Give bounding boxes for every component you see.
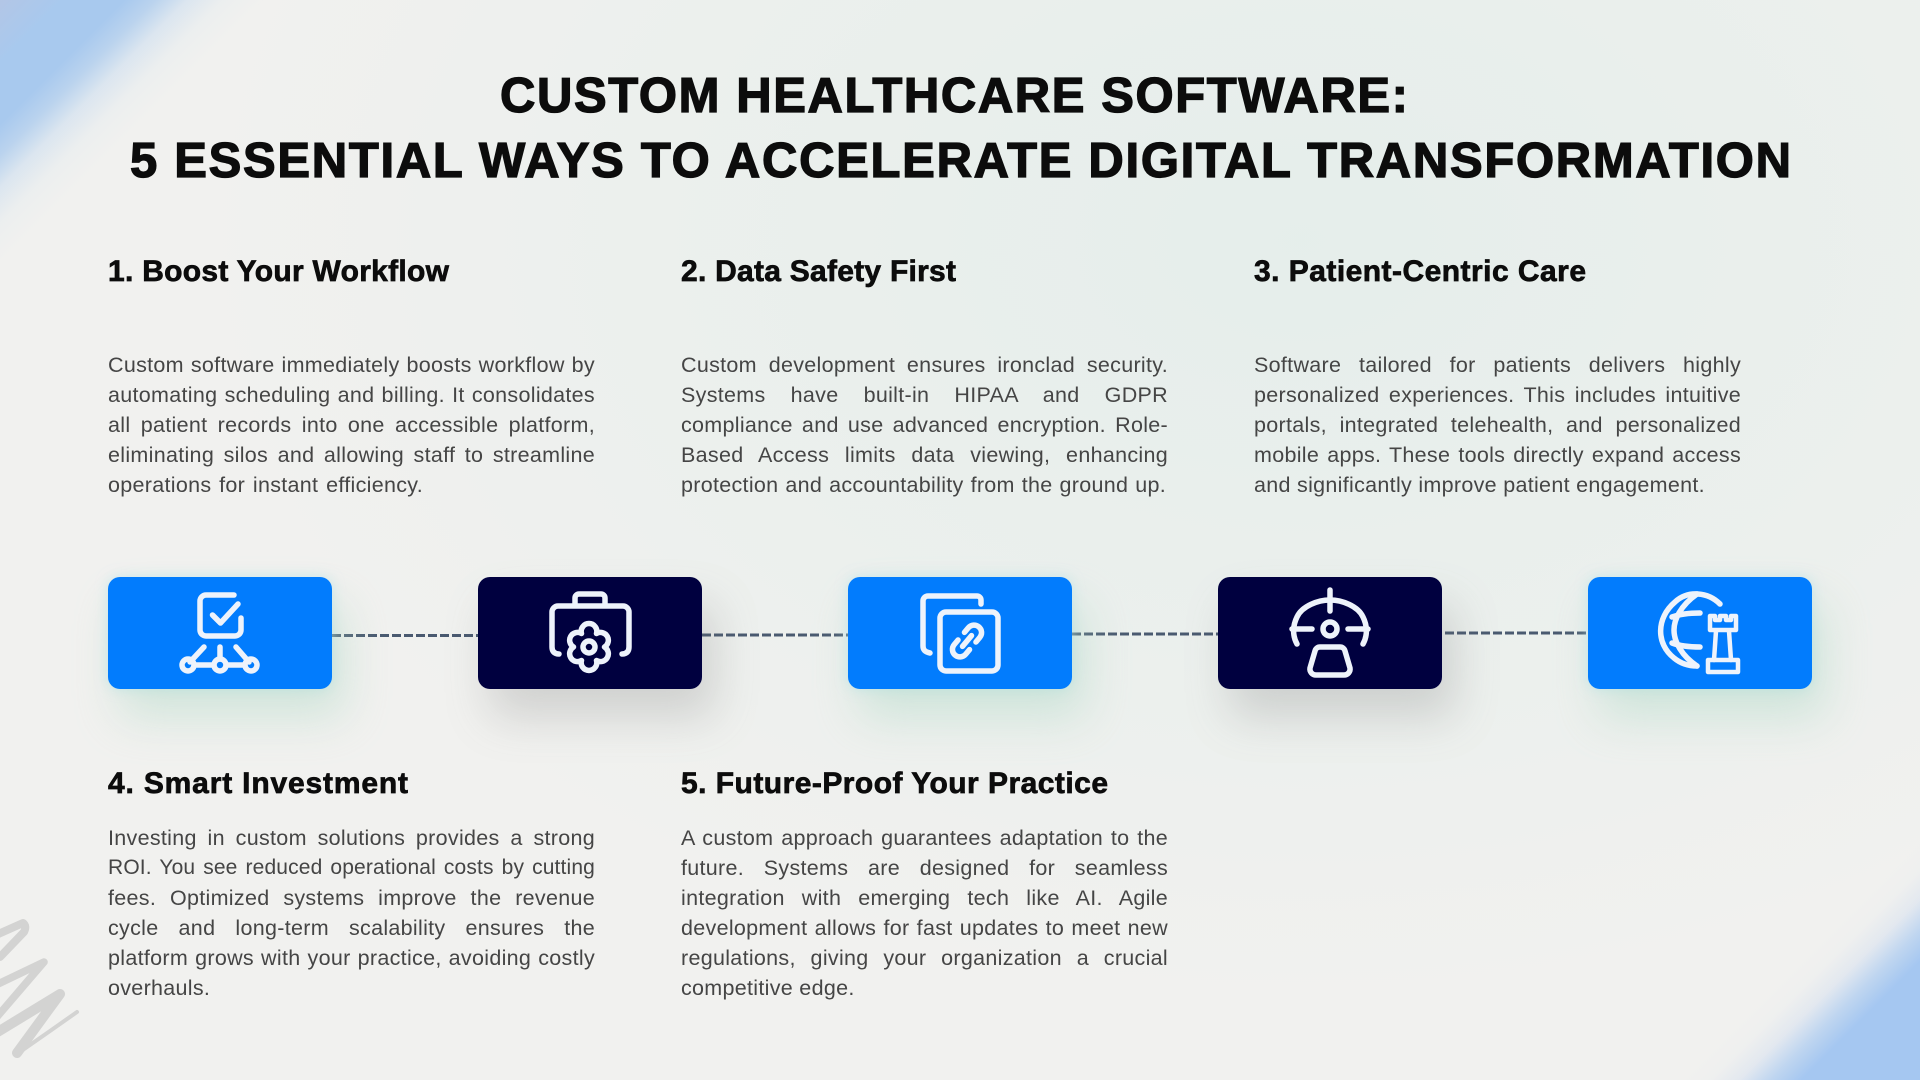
heading: section 1: 1. Boost Your Workflow [108,255,450,288]
text: section 4: platform grows with your practice, avoiding costly [108,946,595,970]
icon: linked documents [923,596,998,671]
title: CUSTOM HEALTHCARE SOFTWARE: [500,69,1408,123]
text: section 2: compliance and use advanced encryption. Role- [681,413,1168,437]
text: section 1: all patient records into one accessible platform, [108,413,595,437]
text: section 3: mobile apps. These tools directly expand access [1254,443,1741,467]
icons [179,587,1740,678]
icon tile 4 [1218,577,1442,689]
text: section 3: and significantly improve patient engagement. [1254,473,1705,497]
text: section 5: regulations, giving your organization a crucial [681,946,1168,970]
text: section 2: Systems have built-in HIPAA and GDPR [681,383,1168,407]
text: section 1: operations for instant efficiency. [108,473,423,497]
icon tile 1 [108,577,332,689]
text: section 1 [108,353,595,497]
text: section 5: competitive edge. [681,976,855,1000]
text: section 4: overhauls. [108,976,210,1000]
text: section 2: Based Access limits data viewing, enhancing [681,443,1168,467]
text: section 4 [108,826,595,1000]
icon tile 3 [848,577,1072,689]
heading: section 2: 2. Data Safety First [681,255,956,288]
text: section 5: A custom approach guarantees adaptation to the [681,826,1168,850]
text: section 5: future. Systems are designed for seamless [681,856,1168,880]
icon: target person [1292,590,1368,675]
text: section 2: protection and accountability from the ground up. [681,473,1166,497]
heading: section 3: 3. Patient-Centric Care [1254,255,1586,288]
icon: briefcase with gear [552,594,629,670]
text: section 5: development allows for fast updates to meet new [681,916,1168,940]
text: section 1: automating scheduling and billing. It consolidates [108,383,595,407]
text: section 2 [681,353,1168,497]
text: section 3: personalized experiences. This includes intuitive [1254,383,1741,407]
icon tile 2 [478,577,702,689]
text: section 1: eliminating silos and allowing staff to streamline [108,443,595,467]
connector: dashed line [332,632,1586,637]
text: section 1: Custom software immediately boosts workflow by [108,353,595,377]
scribble decoration [0,919,79,1058]
heading: section 4: 4. Smart Investment [108,767,408,800]
text: section 4: fees. Optimized systems improve the revenue [108,886,595,910]
icon: globe and chess rook [1661,594,1738,672]
text: section 4: Investing in custom solutions provides a strong [108,826,595,850]
text: section 4: ROI. You see reduced operational costs by cutting [108,856,595,879]
title [130,69,1791,188]
text: section 3: Software tailored for patients delivers highly [1254,353,1741,377]
text: section 4: cycle and long-term scalability ensures the [108,916,595,940]
icon: checklist network [182,595,257,671]
icon tile 5 [1588,577,1812,689]
text: section 3: portals, integrated telehealth, and personalized [1254,413,1741,437]
text: section 5 [681,826,1168,1000]
text: section 5: integration with emerging tech like AI. Agile [681,886,1168,910]
heading: section 5: 5. Future-Proof Your Practice [681,767,1108,800]
text: section 3 [1254,353,1741,497]
text: section 2: Custom development ensures ironclad security. [681,353,1168,377]
title: 5 ESSENTIAL WAYS TO ACCELERATE DIGITAL TRANSFORMATION [130,134,1791,188]
